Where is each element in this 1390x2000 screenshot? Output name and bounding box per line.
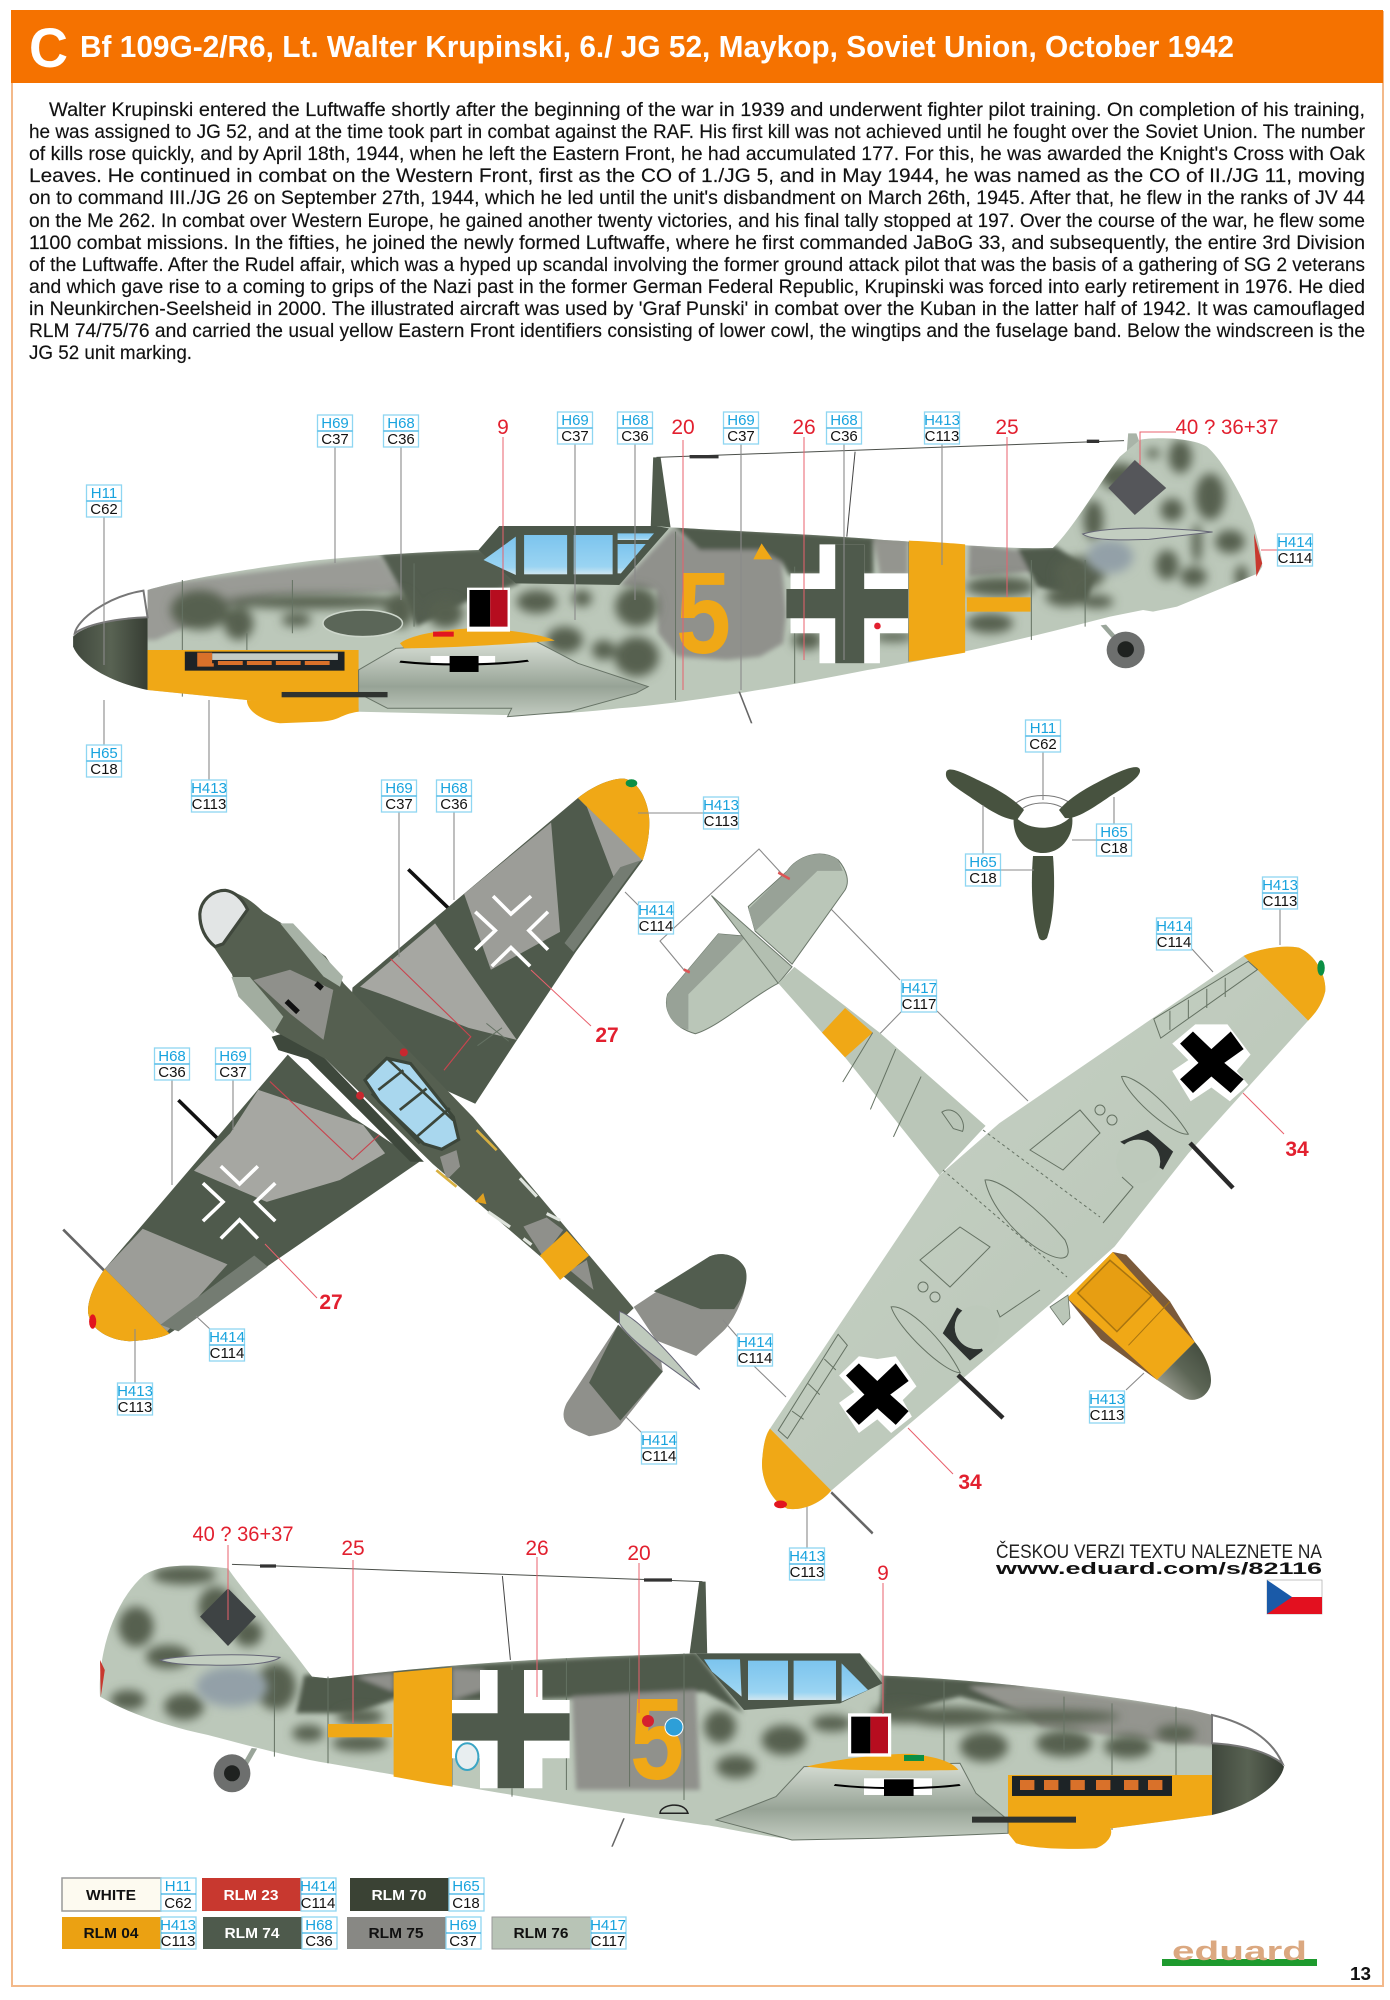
tag H69 C37 [216,1048,250,1081]
panel lines [274,1653,1176,1830]
biography text block [29,99,1365,364]
spinner white arc [1212,1715,1282,1763]
tag H68 C36: C36 [387,431,415,448]
callout numbers: side profile: 26 [792,416,816,439]
canopy frame [479,526,669,585]
tag H68 C36: C36 [830,428,858,445]
tag H414 C114: H414 [1277,534,1313,551]
pitot [831,1492,873,1533]
biography text block: JG 52 unit marking. [29,342,192,364]
exhaust [1012,1776,1172,1796]
tag H413 C113: C113 [925,428,959,445]
eduard logo: eduard [1172,1936,1307,1966]
oil cooler [1008,1824,1111,1849]
callout numbers: side profile: 20 [671,416,695,439]
cross upper [1172,1024,1251,1101]
aerial wire and mast [232,1564,707,1660]
biography text block: on the Me 262. In combat over Western Europe, he gained another twenty victories, and his final tally stopped at 197. Over the course of the war, he flew some [29,210,1365,232]
tag H11 C62 [86,485,122,518]
swatch RLM 70: RLM 70 [372,1887,426,1904]
spinner outline [1009,796,1077,812]
aircraft: right side profile [100,1564,1284,1849]
green marker [904,1755,924,1761]
tag H69 C37: H69 [321,415,349,432]
tailplane [160,1655,280,1665]
code H413 C113: C113 [161,1933,195,1950]
tag H417 C117: C117 [902,996,936,1013]
yellow number 5: 5 [676,548,731,678]
tag H65 C18: C18 [90,761,118,778]
tag H414 C114 [638,902,674,935]
title text: Bf 109G-2/R6, Lt. Walter Krupinski, 6./ JG 52, Maykop, Soviet Union, October 1942 [80,29,1234,64]
tag H69 C37 [724,412,758,445]
swatch WHITE [62,1878,161,1911]
tag H68 C36: C36 [440,796,468,813]
code H414 C114: H414 [300,1878,336,1895]
tag H414 C114: C114 [642,1448,676,1465]
tag H69 C37: H69 [561,412,589,429]
antenna under belly [612,1818,624,1847]
icon: czech flag [1267,1580,1322,1614]
tag H65 C18: H65 [90,745,118,762]
tag H11 C62 [1026,720,1060,753]
tag H417 C117 [901,980,937,1013]
callout numbers: side profile: 25 [995,416,1019,439]
antenna under belly [739,692,752,723]
czech version note: ČESKOU VERZI TEXTU NALEZNETE NA [996,1541,1322,1563]
tag H413 C113: H413 [789,1548,825,1565]
center section panel [918,1105,1133,1317]
landing gear tail wheel [1103,625,1145,668]
exhaust slots [286,983,322,1012]
tag H414 C114 [1156,918,1192,951]
red reference lines: top view [265,970,591,1298]
rudder edge [619,1311,700,1389]
tailplanes [666,854,847,1034]
tag H69 C37: H69 [219,1048,247,1065]
tag H413 C113 [789,1548,825,1581]
wing cross [834,1778,960,1796]
tag H414 C114 [1277,534,1313,567]
tag H68 C36: H68 [440,780,468,797]
tag H413 C113 [191,780,227,813]
blade right [1059,767,1140,818]
yellow number 5: 5 [630,1674,684,1804]
cross lower [839,1356,916,1433]
tag H69 C37: C37 [321,431,349,448]
tag H65 C18 [966,854,1000,887]
tag H413 C113: H413 [703,797,739,814]
rudder red edge [100,1660,105,1697]
blade left [946,770,1024,820]
spinner [1212,1743,1284,1815]
callout numbers: right profile: 25 [341,1537,365,1560]
fuselage base [148,438,1262,715]
tag H413 C113 [1262,877,1298,910]
czech version note: www.eduard.com/s/82116 [994,1559,1322,1578]
tag H414 C114: C114 [1157,934,1191,951]
panel lines [182,532,1085,700]
tag H69 C37: C37 [727,428,755,445]
swatch RLM 75: RLM 75 [368,1925,424,1942]
tag H68 C36 [154,1048,190,1081]
biography text block: on to command III./JG 26 on September 27th, 1944, which he led until the unit's disbandment on March 26th, 1945. After that, he flew in the ranks of JV 44 [29,187,1365,209]
callout numbers: right profile: 26 [525,1537,549,1560]
callout numbers: right profile [192,1523,889,1585]
biography text block: of the Luftwaffe. After the Rudel affair, which was a hyped up scandal involving the former ground attack pilot that was the basis of a gathering of SG 2 veterans [29,254,1365,276]
red spots [356,1048,408,1100]
callout numbers: plan views: 34 [958,1471,982,1494]
rudder red tip [1254,533,1262,577]
tag H11 C62: C62 [1029,736,1057,753]
pitot tube [63,1230,105,1271]
tag H414 C114: H414 [209,1329,245,1346]
code H69 C37: C37 [449,1933,477,1950]
tag H65 C18 [1096,824,1132,857]
fuselage band [394,1667,452,1787]
tailplane lower [564,1325,663,1436]
wheel wells [943,1130,1173,1361]
swatch WHITE: WHITE [86,1887,136,1904]
cannon barrel [282,692,388,697]
rudder inspection [660,1805,688,1813]
tag H69 C37: C37 [561,428,589,445]
tag H413 C113 [117,1383,153,1416]
tag H417 C117: H417 [901,980,937,997]
camouflage [110,1566,1216,1790]
tag H69 C37: H69 [727,412,755,429]
tag H11 C62: H11 [1030,720,1056,737]
code H68 C36 [302,1917,337,1950]
tag H413 C113: C113 [704,813,738,830]
swatch RLM 74 [203,1917,302,1949]
tag H68 C36 [384,415,418,448]
red reference lines: side profile [503,432,1278,690]
eduard logo [1162,1936,1317,1966]
callout numbers: right profile: 40 ? 36+37 [192,1523,294,1546]
tag H68 C36: C36 [158,1064,186,1081]
wing cross [400,656,528,672]
tag H69 C37: C37 [219,1064,247,1081]
page number: 13 [1350,1964,1371,1984]
unit marking [848,1713,891,1757]
tag H68 C36: H68 [621,412,649,429]
fin diamond [200,1588,256,1646]
tag H413 C113: C113 [1263,893,1297,910]
tailplane [1083,528,1213,540]
biography text block: in Neunkirchen-Seelsheid in 2000. The illustrated aircraft was used by 'Graf Punski' in combat over the Kuban in the latter half of 1942. It was camouflaged [29,298,1365,320]
red reference lines: right profile [228,1545,883,1723]
cannon barrel [972,1817,1076,1823]
leader lines: propeller and underside [660,751,1280,1548]
tag H414 C114 [737,1334,773,1367]
wing root bulge [400,628,555,648]
tag H65 C18 [86,745,122,778]
cowling bulges [280,923,343,987]
canopy glass [484,533,654,575]
colour code tags [86,412,1313,1581]
callout numbers: side profile: 40 ? 36+37 [1176,416,1278,439]
tag H413 C113: C113 [192,796,226,813]
code H65 C18: C18 [452,1895,480,1912]
tag H68 C36 [618,412,652,445]
code H65 C18 [449,1878,484,1912]
red wing lines [270,959,471,1160]
tag H413 C113: C113 [790,1564,824,1581]
code H417 C117: H417 [590,1917,626,1934]
oil cooler [247,700,359,723]
radiators [891,1076,1188,1373]
landing gear tail wheel [214,1748,254,1792]
swatch RLM 23 [202,1878,301,1911]
tag H68 C36 [436,780,472,813]
tag H11 C62: C62 [90,501,118,518]
wing root bulge [806,1754,958,1771]
tag H11 C62: H11 [91,485,117,502]
fuselage band [540,1231,589,1280]
code H65 C18: H65 [452,1878,480,1895]
swatch RLM 70 [350,1878,449,1911]
biography text block: and which gave rise to a coming to grips of the Nazi past in the former German Federal Republic, Krupinski was forced into early retirement in 1976. He died [29,276,1365,298]
biography text block: Leaves. He continued in combat on the Western Front, first as the CO of 1./JG 5, and in May 1944, he was named as the CO of II./JG 11, moving [29,165,1365,187]
code H417 C117 [590,1917,626,1950]
tag H414 C114: H414 [641,1432,677,1449]
red reference lines: underside [908,1093,1284,1474]
cannon gondola cowl [359,642,648,717]
code H413 C113 [160,1917,196,1950]
spinner white arc [75,591,148,633]
tag H69 C37 [382,780,416,813]
propeller [946,767,1140,940]
code H414 C114: C114 [301,1895,335,1912]
biography text block: of kills rose quickly, and by April 18th, 1944, when he left the Eastern Front, he had accumulated 177. For this, he was awarded the Knight's Cross with Oak [29,143,1365,165]
swatch RLM 74: RLM 74 [224,1925,280,1942]
aircraft: left side profile [73,433,1262,723]
spinner [200,890,248,947]
fuselage bar [328,1724,392,1737]
fuselage band [822,1008,873,1057]
spinner [73,617,148,690]
intake oval [323,610,402,637]
tag H68 C36: H68 [158,1048,186,1065]
tag H68 C36: H68 [830,412,858,429]
code H11 C62 [161,1878,196,1912]
tag H65 C18: H65 [969,854,997,871]
canopy glass [704,1659,868,1702]
swatch RLM 04: RLM 04 [84,1925,139,1942]
aircraft: top view [63,779,747,1436]
camouflage [139,440,1248,677]
callout numbers: side profile [497,416,1278,439]
tag H65 C18: C18 [1100,840,1128,857]
fin diamond [1108,460,1166,515]
tag H69 C37 [558,412,592,445]
engine underside [1067,1252,1211,1400]
hub [1014,815,1072,853]
tailplane upper [634,1254,746,1356]
tag H414 C114: C114 [639,918,673,935]
aerial wire and mast [651,433,1142,537]
panel letter C: C [29,16,68,79]
callout numbers: plan views: 27 [319,1291,343,1314]
yellow chevron [753,543,772,559]
wings underside [762,947,1325,1509]
leader lines: side profile [104,444,942,780]
fuselage [200,890,634,1323]
tag H414 C114: C114 [1278,550,1312,567]
tag H413 C113: H413 [191,780,227,797]
rudder sliver [711,896,792,983]
wing root fillet [1050,1295,1070,1325]
exhaust [185,652,345,671]
tag H414 C114: H414 [737,1334,773,1351]
tag H413 C113 [1089,1391,1125,1424]
code H69 C37: H69 [449,1917,477,1934]
tag H414 C114: H414 [1156,918,1192,935]
tag H414 C114 [209,1329,245,1362]
yellow cowling [148,650,359,712]
tag H68 C36: H68 [387,415,415,432]
tag H414 C114 [641,1432,677,1465]
tag H413 C113: H413 [1262,877,1298,894]
callout numbers: side profile: 9 [497,416,509,439]
swatch RLM 76 [492,1917,591,1949]
balkenkreuz [452,1670,570,1788]
fuselage bar [967,597,1031,612]
ailerons [778,961,1257,1439]
swatch RLM 76: RLM 76 [514,1925,568,1942]
red marker [433,632,454,637]
unit marking [467,588,510,632]
czech version note [994,1541,1322,1578]
colour legend [62,1878,626,1950]
tag H413 C113: H413 [924,412,960,429]
callout numbers: plan views: 27 [595,1024,619,1047]
tag H65 C18: C18 [969,870,997,887]
tag H69 C37 [318,415,352,448]
code H11 C62: H11 [165,1878,191,1895]
tag H65 C18: H65 [1100,824,1128,841]
balkenkreuz [786,544,908,663]
gun barrels [958,1143,1233,1418]
blade bottom [1032,856,1054,940]
wing tips [762,947,1325,1509]
code H417 C117: C117 [591,1933,625,1950]
yellow cowling [1008,1775,1212,1833]
tag H69 C37: C37 [385,796,413,813]
leader lines: top view [135,812,742,1434]
swatch RLM 75 [347,1917,446,1949]
code H68 C36: H68 [305,1917,333,1934]
tag H414 C114: C114 [210,1345,244,1362]
biography text block: 1100 combat missions. In the fifties, he joined the newly formed Luftwaffe, where he first commanded JaBoG 33, and subsequently, the entire 3rd Division [29,232,1365,254]
swatch RLM 04 [62,1917,161,1949]
canopy [365,1058,459,1149]
tag H68 C36: C36 [621,428,649,445]
canopy frame [696,1653,882,1710]
tag H414 C114: H414 [638,902,674,919]
swatch RLM 23: RLM 23 [224,1887,278,1904]
aircraft: underside view [666,854,1325,1533]
cannon gondola cowl [716,1763,1008,1840]
red and blue roundels on 5 [642,1715,683,1736]
biography text block: Walter Krupinski entered the Luftwaffe shortly after the beginning of the war in 1939 and underwent fighter pilot training. On completion of his training, [49,99,1365,121]
fuselage base [100,1566,1212,1840]
code H11 C62: C62 [164,1895,192,1912]
gun barrels [178,869,448,1139]
title banner [11,10,1383,83]
callout numbers: plan views: 34 [1285,1138,1309,1161]
code H68 C36: C36 [305,1933,333,1950]
tag H69 C37: H69 [385,780,413,797]
tag H413 C113 [924,412,960,445]
callout numbers: right profile: 9 [877,1562,889,1585]
callout numbers: plan views [319,1024,1309,1494]
callout numbers: right profile: 20 [627,1542,651,1565]
rear fuselage camouflage [436,1130,594,1290]
fuselage band [909,541,965,662]
panel lines [843,1033,963,1137]
fuselage underside [778,967,986,1175]
code H413 C113: H413 [160,1917,196,1934]
tag H414 C114: C114 [738,1350,772,1367]
tag H413 C113: H413 [117,1383,153,1400]
tag H413 C113: C113 [1090,1407,1124,1424]
tag H68 C36 [826,412,862,445]
code H414 C114 [300,1878,336,1912]
upper wing [348,779,649,1104]
tag H413 C113 [703,797,739,830]
lower wing [88,1032,424,1341]
tag H413 C113: H413 [1089,1391,1125,1408]
biography text block: he was assigned to JG 52, and at the time took part in combat against the RAF. His first kill was not achieved until he fought over the Soviet Union. The number [29,121,1365,143]
code H69 C37 [446,1917,481,1950]
biography text block: RLM 74/75/76 and carried the usual yellow Eastern Front identifiers consisting of lower cowl, the wingtips and the fuselage band. Below the windscreen is the [29,320,1365,342]
tag H413 C113: C113 [118,1399,152,1416]
